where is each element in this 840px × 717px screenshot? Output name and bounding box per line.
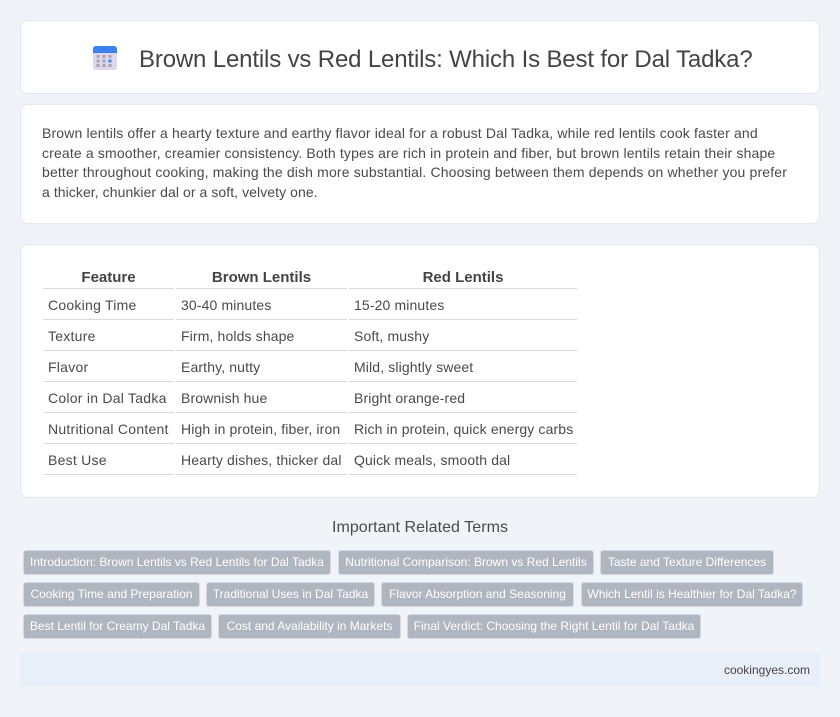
tag xyxy=(581,582,803,607)
row: nutrition: Nutritional Content xyxy=(48,421,169,437)
tag: Cost and Availability in Markets xyxy=(227,619,392,633)
row: best use xyxy=(48,452,510,468)
row: texture: Firm, holds shape xyxy=(181,328,294,344)
row: nutrition xyxy=(48,421,573,437)
footer bar xyxy=(20,653,820,686)
intro paragraph xyxy=(42,125,787,200)
tag xyxy=(218,614,401,639)
row: color: Bright orange-red xyxy=(354,390,465,406)
intro paragraph: better throughout cooking, making the dish more substantial. Choosing between them depends on whether you prefer xyxy=(42,164,787,180)
panel: introduction xyxy=(20,104,820,224)
row: color xyxy=(48,390,465,406)
row: cooking time: 30-40 minutes xyxy=(181,297,271,313)
row: best use: Best Use xyxy=(48,452,107,468)
tag: Cooking Time and Preparation xyxy=(30,587,193,601)
tag: Which Lentil is Healthier for Dal Tadka? xyxy=(587,587,797,601)
tag xyxy=(23,582,200,607)
row: texture xyxy=(48,328,430,344)
title: Brown Lentils vs Red Lentils: Which Is Best for Dal Tadka? xyxy=(139,46,753,73)
row: texture: Texture xyxy=(48,328,96,344)
tag: Flavor Absorption and Seasoning xyxy=(389,587,566,601)
tag: Nutritional Comparison: Brown vs Red Lentils xyxy=(345,555,587,569)
tag xyxy=(381,582,574,607)
row: nutrition: High in protein, fiber, iron xyxy=(181,421,340,437)
tag: Traditional Uses in Dal Tadka xyxy=(213,587,368,601)
tag xyxy=(206,582,375,607)
intro paragraph: a thicker, chunkier dal or a soft, velvety one. xyxy=(42,184,318,200)
tag: Introduction: Brown Lentils vs Red Lentils for Dal Tadka xyxy=(30,555,324,569)
row: texture: Soft, mushy xyxy=(354,328,429,344)
tag: Best Lentil for Creamy Dal Tadka xyxy=(30,619,205,633)
row: cooking time: 15-20 minutes xyxy=(354,297,444,313)
row: best use: Quick meals, smooth dal xyxy=(354,452,510,468)
row: nutrition: Rich in protein, quick energy carbs xyxy=(354,421,573,437)
heading: related terms: Important Related Terms xyxy=(332,519,508,536)
row: cooking time: Cooking Time xyxy=(48,297,137,313)
row: flavor: Earthy, nutty xyxy=(181,359,260,375)
row: flavor xyxy=(48,359,474,375)
tag xyxy=(600,550,774,575)
tag xyxy=(407,614,701,639)
tag xyxy=(23,550,331,575)
header panel xyxy=(20,20,820,94)
row: color: Brownish hue xyxy=(181,390,267,406)
tag xyxy=(23,614,212,639)
table header: Red Lentils xyxy=(423,269,503,286)
panel: comparison table xyxy=(20,244,820,498)
table header: Feature xyxy=(81,269,136,286)
related term tags xyxy=(23,550,803,639)
tag xyxy=(338,550,594,575)
row: cooking time xyxy=(48,297,444,313)
table header xyxy=(81,269,503,286)
tag: Final Verdict: Choosing the Right Lentil for Dal Tadka xyxy=(414,619,694,633)
intro paragraph: create a smoother, creamier consistency. Both types are rich in protein and fiber, but brown lentils retain their shape xyxy=(42,145,775,161)
row: best use: Hearty dishes, thicker dal xyxy=(181,452,342,468)
table xyxy=(43,269,577,475)
table header: Brown Lentils xyxy=(212,269,311,286)
row: flavor: Mild, slightly sweet xyxy=(354,359,473,375)
tag: Taste and Texture Differences xyxy=(608,555,766,569)
row: color: Color in Dal Tadka xyxy=(48,390,167,406)
intro paragraph: Brown lentils offer a hearty texture and earthy flavor ideal for a robust Dal Tadka, while red lentils cook faster and xyxy=(42,125,758,141)
icon: calendar xyxy=(93,46,117,70)
row: flavor: Flavor xyxy=(48,359,88,375)
footer credit: cookingyes.com xyxy=(724,663,810,677)
